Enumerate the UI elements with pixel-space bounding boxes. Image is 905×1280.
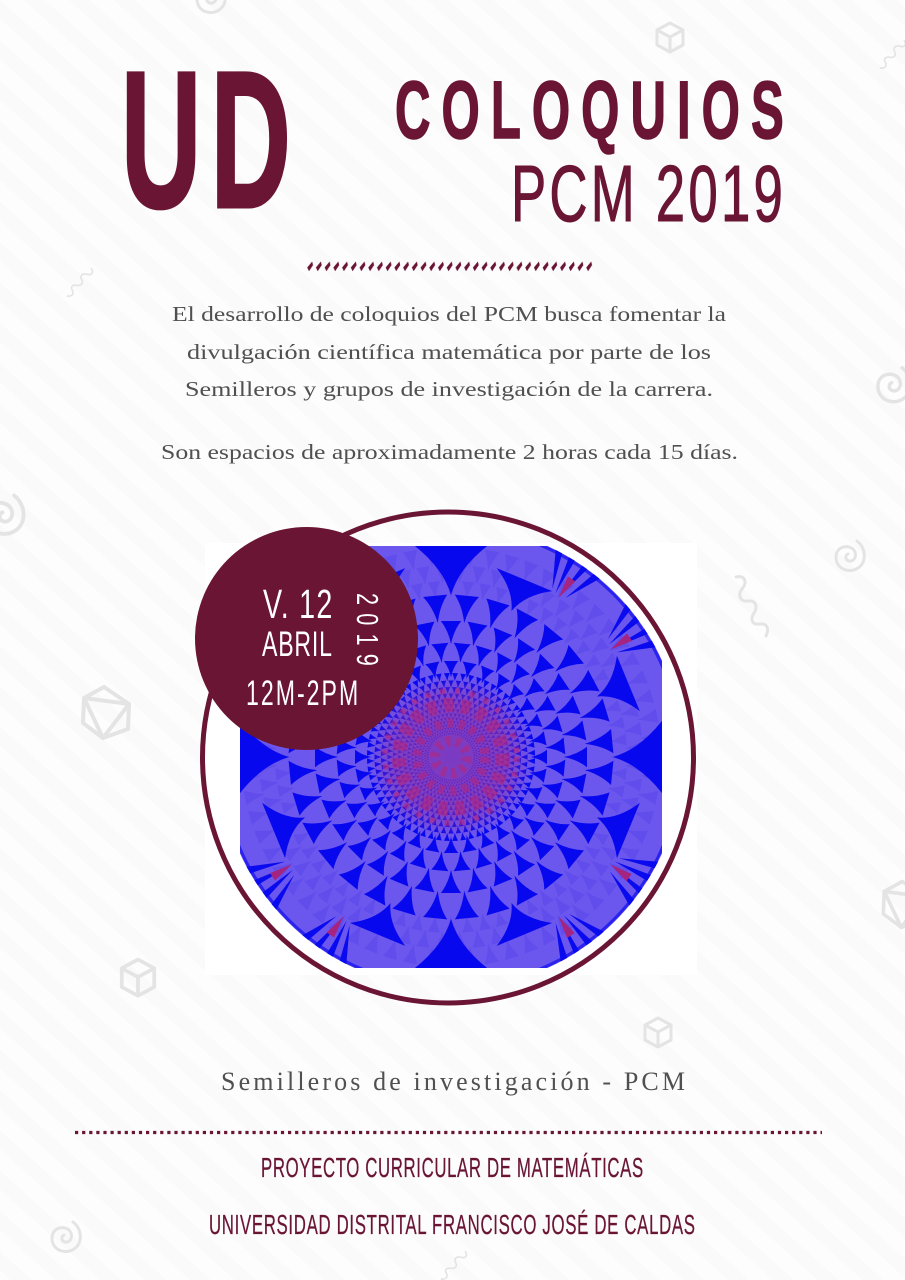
title: PCM 2019: PCM 2019 (511, 150, 783, 239)
title: UD: UD (121, 30, 291, 249)
date badge (195, 527, 418, 750)
year vertical: 2019 (350, 593, 385, 666)
intro paragraph: Semilleros y grupos de investigación de la carrera. (185, 377, 713, 401)
divider: slanted marks (306, 262, 594, 272)
intro paragraph: divulgación científica matemática por parte de los (187, 340, 711, 364)
intro paragraph (172, 302, 727, 401)
intro paragraph: El desarrollo de coloquios del PCM busca fomentar la (172, 302, 727, 326)
time: 12M-2PM (246, 674, 358, 713)
white image backing (205, 543, 697, 975)
dotted divider (75, 1131, 822, 1134)
date: V. 12: V. 12 (263, 582, 332, 627)
title: COLOQUIOS: COLOQUIOS (395, 65, 784, 156)
subtitle: research groups: Semilleros de investigación - PCM (221, 1067, 685, 1096)
circle frame (202, 512, 694, 1003)
program name: PROYECTO CURRICULAR DE MATEMÁTICAS (261, 1152, 643, 1183)
month: ABRIL: ABRIL (262, 625, 332, 664)
schedule sentence: Son espacios de aproximadamente 2 horas cada 15 días. (161, 440, 738, 464)
university name: UNIVERSIDAD DISTRITAL FRANCISCO JOSÉ DE CALDAS (209, 1209, 695, 1240)
fractal image (240, 546, 662, 968)
